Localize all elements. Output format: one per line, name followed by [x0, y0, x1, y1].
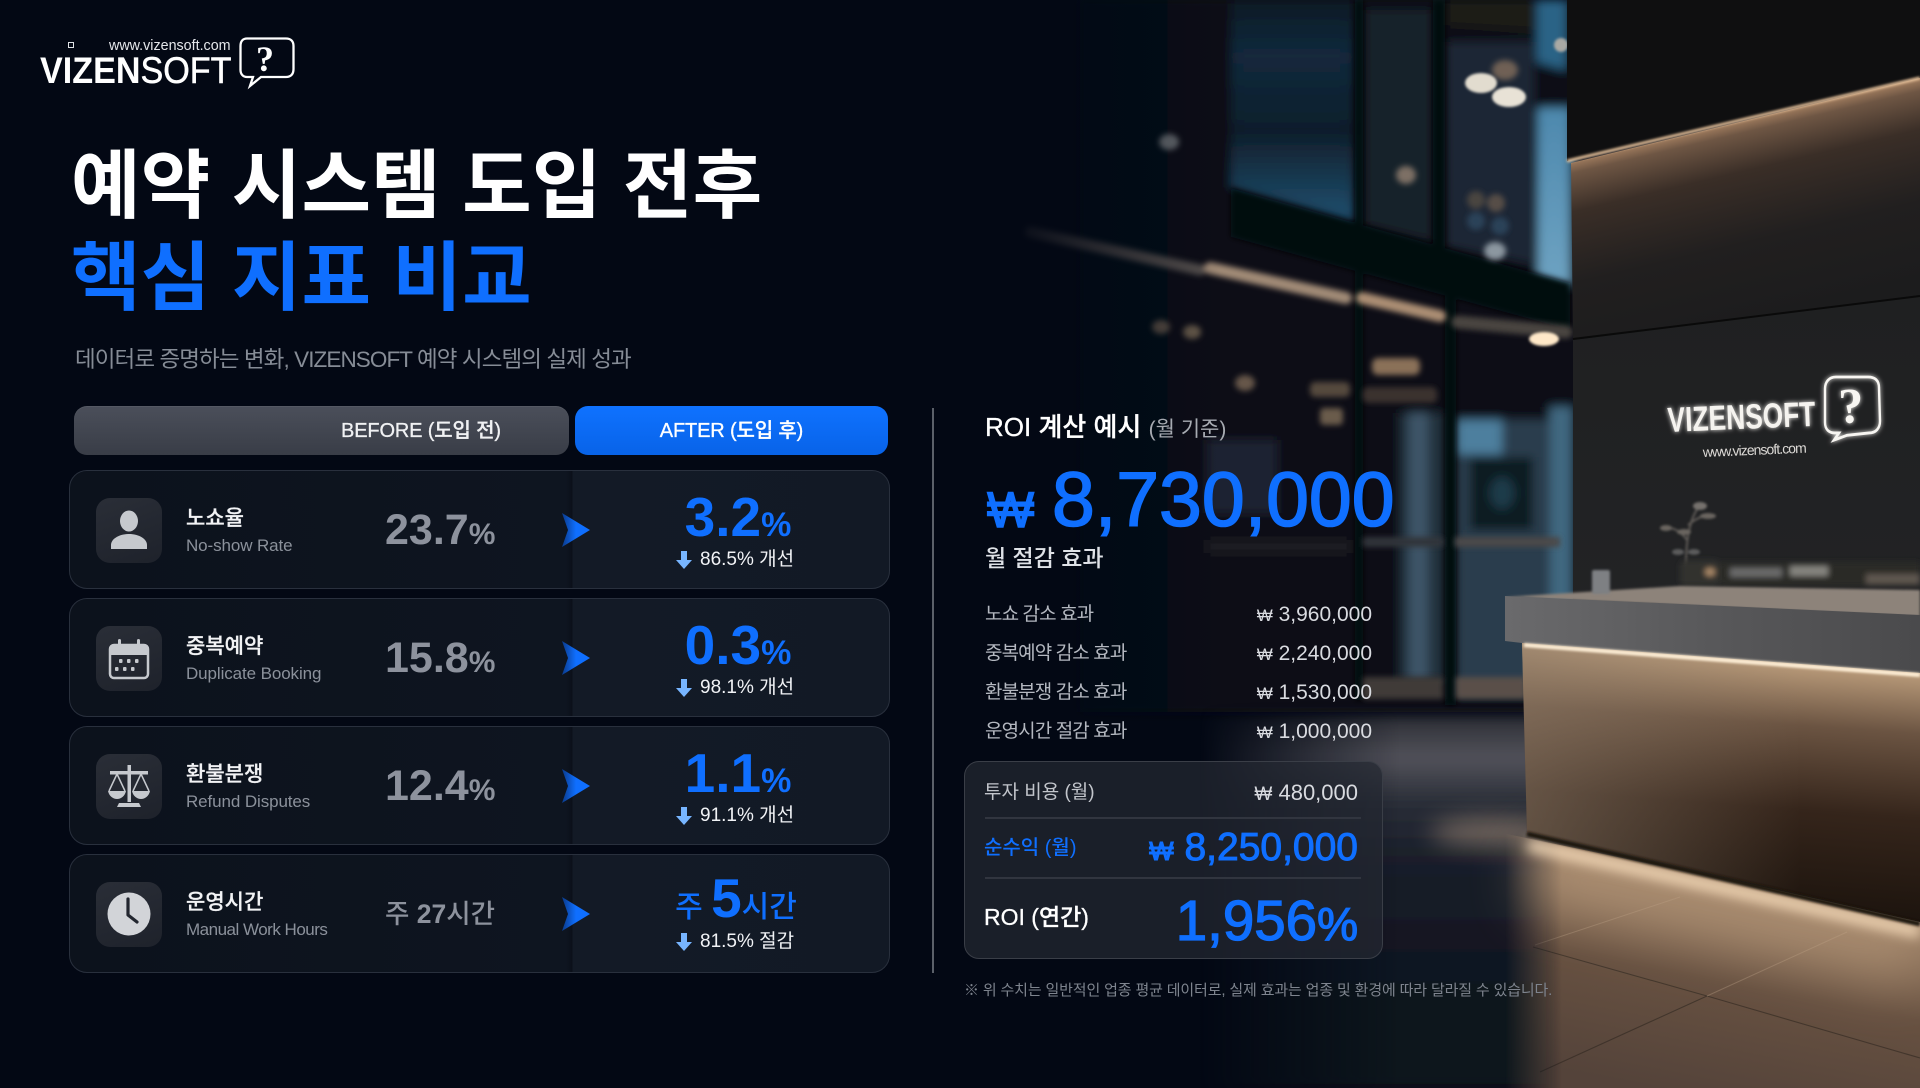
bokeh lights and reflections: [1030, 60, 1566, 699]
saving: refunds: 환불분쟁 감소 효과: [985, 682, 1126, 703]
wall sign: [1667, 377, 1880, 440]
arrow down: [676, 551, 692, 569]
arrow down: [676, 933, 692, 951]
amount: 8,730,000: [1052, 457, 1395, 543]
arrow down: [676, 807, 692, 825]
after value: 0.3%: [685, 614, 791, 676]
saving: duplicates: 중복예약 감소 효과: [985, 643, 1126, 664]
before value: 15.8%: [385, 634, 495, 682]
row: refund disputes: [69, 726, 890, 845]
floor: [1224, 712, 1920, 1088]
improvement: 86.5% 개선: [700, 549, 794, 570]
improvement: 98.1% 개선: [700, 677, 794, 698]
title: [71, 145, 762, 321]
english label: Manual Work Hours: [186, 920, 327, 939]
english label: No-show Rate: [186, 536, 293, 555]
title line 1: 예약 시스템 도입 전후: [71, 145, 762, 229]
title line 2: 핵심 지표 비교: [71, 237, 532, 321]
logo speech bubble: ?: [256, 39, 274, 79]
left fade over the photo: [1000, 0, 1600, 720]
won sign: ₩: [987, 482, 1034, 538]
icon: calendar: [96, 626, 162, 691]
saving list: [985, 603, 1372, 743]
wall sign: VIZENSOFT: [1667, 395, 1816, 440]
logo wordmark: VIZENSOFT: [40, 49, 231, 91]
english label: Refund Disputes: [186, 792, 310, 811]
header: before: [74, 406, 569, 455]
saving: refunds: ₩ 1,530,000: [1257, 681, 1372, 704]
investment value: ₩ 480,000: [1254, 780, 1358, 805]
icon: person: [96, 498, 162, 563]
background photo: blurred lobby with reception desk: [1028, 0, 1920, 1088]
saving: refunds: [985, 681, 1372, 704]
investment label: 투자 비용 (월): [984, 782, 1095, 803]
row: manual work hours: [69, 854, 890, 973]
row: no-show rate: [69, 470, 890, 589]
logo small glyph: [68, 42, 74, 48]
arrow: [562, 897, 590, 931]
label: 노쇼율: [186, 507, 244, 530]
roi label: ROI (연간): [984, 904, 1089, 930]
after value: 주 5시간: [675, 867, 797, 929]
saving: no-show: [985, 603, 1372, 626]
arrow: [562, 513, 590, 547]
arrow: [562, 641, 590, 675]
wall: [1567, 0, 1920, 700]
net profit label: 순수익 (월): [984, 837, 1076, 859]
improvement: 91.1% 개선: [700, 805, 794, 826]
window glass: [1080, 0, 1580, 712]
logo speech bubble: [239, 37, 295, 90]
saving: no-show: 노쇼 감소 효과: [985, 604, 1093, 625]
plant and desk items: [1660, 502, 1716, 566]
saving: duplicates: ₩ 2,240,000: [1257, 642, 1372, 665]
before value: 12.4%: [385, 762, 495, 810]
english label: Duplicate Booking: [186, 664, 321, 683]
label: 운영시간: [186, 891, 263, 914]
arrow down: [676, 679, 692, 697]
label: 중복예약: [186, 635, 263, 658]
saving: duplicates: [985, 642, 1372, 665]
after value: 1.1%: [685, 742, 791, 804]
saving: hours: ₩ 1,000,000: [1257, 720, 1372, 743]
logo url: www.vizensoft.com: [109, 38, 231, 54]
wall sign: ?: [1837, 377, 1864, 434]
arrow: [562, 769, 590, 803]
header: after: [575, 406, 888, 455]
improvement: 81.5% 절감: [700, 931, 794, 952]
roi caption: 월 절감 효과: [985, 545, 1104, 571]
vertical divider: [932, 408, 934, 973]
saving: hours: [985, 720, 1372, 743]
label: 환불분쟁: [186, 763, 263, 786]
roi value: 1,956%: [1176, 889, 1358, 952]
saving: hours: 운영시간 절감 효과: [985, 721, 1126, 742]
net profit value: ₩ 8,250,000: [1149, 826, 1358, 869]
after value: 3.2%: [685, 486, 791, 548]
header: before: BEFORE (도입 전): [341, 420, 501, 442]
roi big number: [986, 457, 1395, 543]
saving: no-show: ₩ 3,960,000: [1257, 603, 1372, 626]
window mullions: [1231, 0, 1570, 705]
icon: scale: [96, 754, 162, 819]
roi summary box: [964, 761, 1383, 959]
footnote: ※ 위 수치는 일반적인 업종 평균 데이터로, 실제 효과는 업종 및 환경에 따라 달라질 수 있습니다.: [964, 982, 1552, 999]
row: duplicate booking: [69, 598, 890, 717]
icon: clock: [96, 882, 162, 947]
before value: 23.7%: [385, 506, 495, 554]
logo: [40, 37, 295, 91]
reception desk: [1505, 570, 1920, 924]
header: after: AFTER (도입 후): [660, 420, 803, 442]
background photo: blurred lobby with reception desk: www.vizensoft.com: [1701, 440, 1807, 460]
before value: 주 27시간: [385, 899, 495, 929]
subtitle: 데이터로 증명하는 변화, VIZENSOFT 예약 시스템의 실제 성과: [75, 347, 631, 372]
roi heading: ROI 계산 예시 (월 기준): [985, 412, 1226, 442]
